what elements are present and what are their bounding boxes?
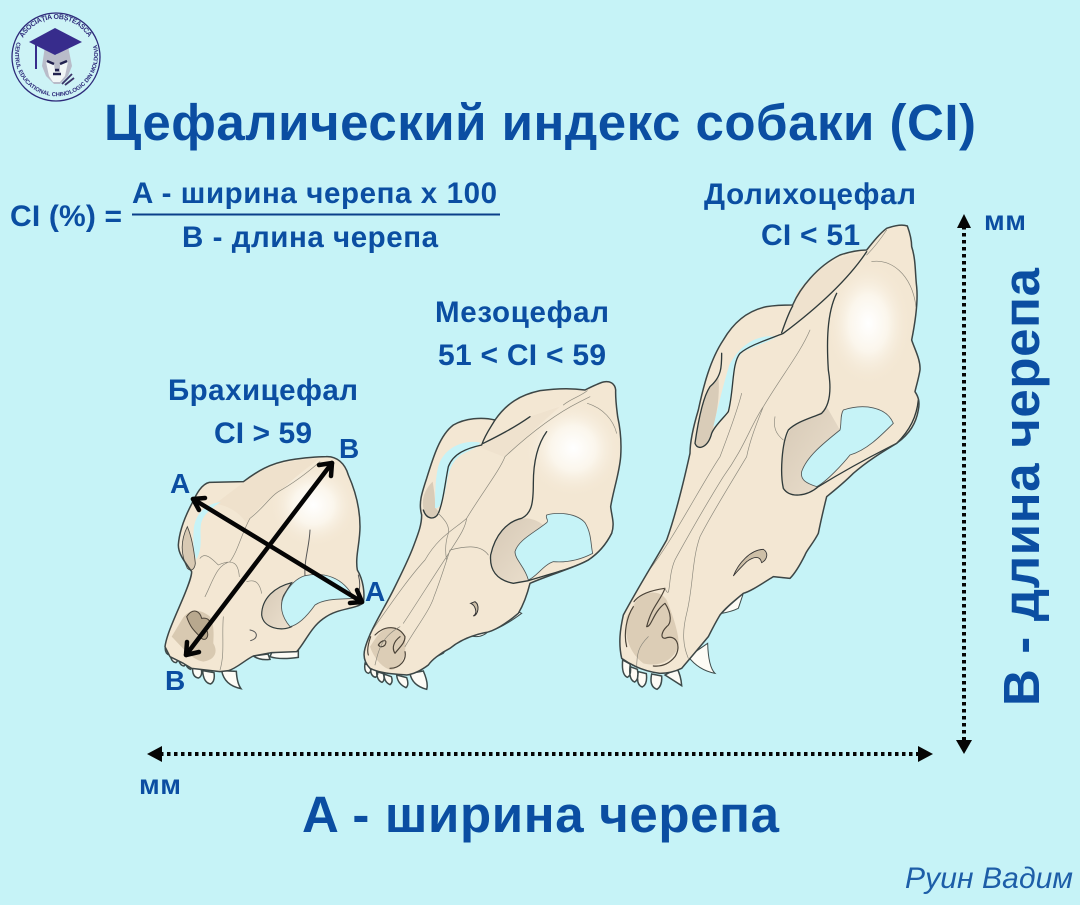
formula (10, 177, 500, 254)
shaded temporal fossa (182, 527, 195, 570)
point labels A and B: A (170, 468, 190, 499)
nasal opening (370, 627, 405, 670)
point labels A and B: B (339, 433, 359, 464)
label: dolichocephalic (704, 178, 916, 252)
orbit shadow (262, 583, 292, 629)
unit label vertical: мм (984, 205, 1026, 236)
point labels A and B: B (165, 665, 185, 696)
orbit shadow (491, 518, 543, 582)
formula: A - ширина черепа x 100 (132, 177, 497, 210)
point labels A and B (165, 433, 385, 696)
label: mesocephalic: Мезоцефал (435, 296, 609, 329)
orbit opening (801, 407, 893, 487)
arrow: horizontal dotted axis (147, 746, 933, 762)
author: Руин Вадим (905, 862, 1073, 895)
axis label: skull width: A - ширина черепа (302, 786, 780, 843)
orbit opening (515, 513, 593, 580)
arrows: A and B measurements on the small skull (186, 463, 362, 655)
orbit shadow (782, 407, 840, 495)
logo: Asociatia Obsteasca badge: ASOCIAȚIA OBȘTEASCĂ (20, 14, 92, 38)
shaded temporal fossa (423, 482, 439, 519)
arrow: vertical dotted axis (956, 214, 972, 754)
title: Цефалический индекс собаки (CI) (104, 94, 976, 151)
skull: mesocephalic (364, 382, 623, 689)
point labels A and B: A (365, 576, 385, 607)
label: brachycephalic: CI > 59 (214, 417, 312, 450)
skull: dolichocephalic (620, 225, 920, 689)
shaded temporal fossa (695, 377, 719, 447)
orbit opening (281, 574, 354, 627)
nasal opening (626, 592, 679, 664)
gap behind the cheek arch (193, 502, 221, 559)
skull: brachycephalic (165, 457, 364, 689)
nasal cavity (172, 611, 216, 662)
gap behind the cheek arch (713, 336, 777, 427)
logo: Asociatia Obsteasca badge (11, 12, 101, 102)
label: mesocephalic (435, 296, 609, 372)
unit label horizontal: мм (139, 769, 181, 800)
label: brachycephalic: Брахицефал (168, 374, 358, 407)
formula: B - длина черепа (182, 221, 439, 254)
formula: CI (%) = (10, 200, 122, 233)
label: dolichocephalic: Долихоцефал (704, 178, 916, 211)
axis label: skull length: B - длина черепа (993, 267, 1050, 706)
label: mesocephalic: 51 < CI < 59 (438, 339, 606, 372)
logo: Asociatia Obsteasca badge: CENTRUL EDUCATIONAL CHINOLOGIC DIN MOLDOVA (15, 42, 98, 96)
label: dolichocephalic: CI < 51 (761, 219, 860, 252)
label: brachycephalic (168, 374, 358, 450)
